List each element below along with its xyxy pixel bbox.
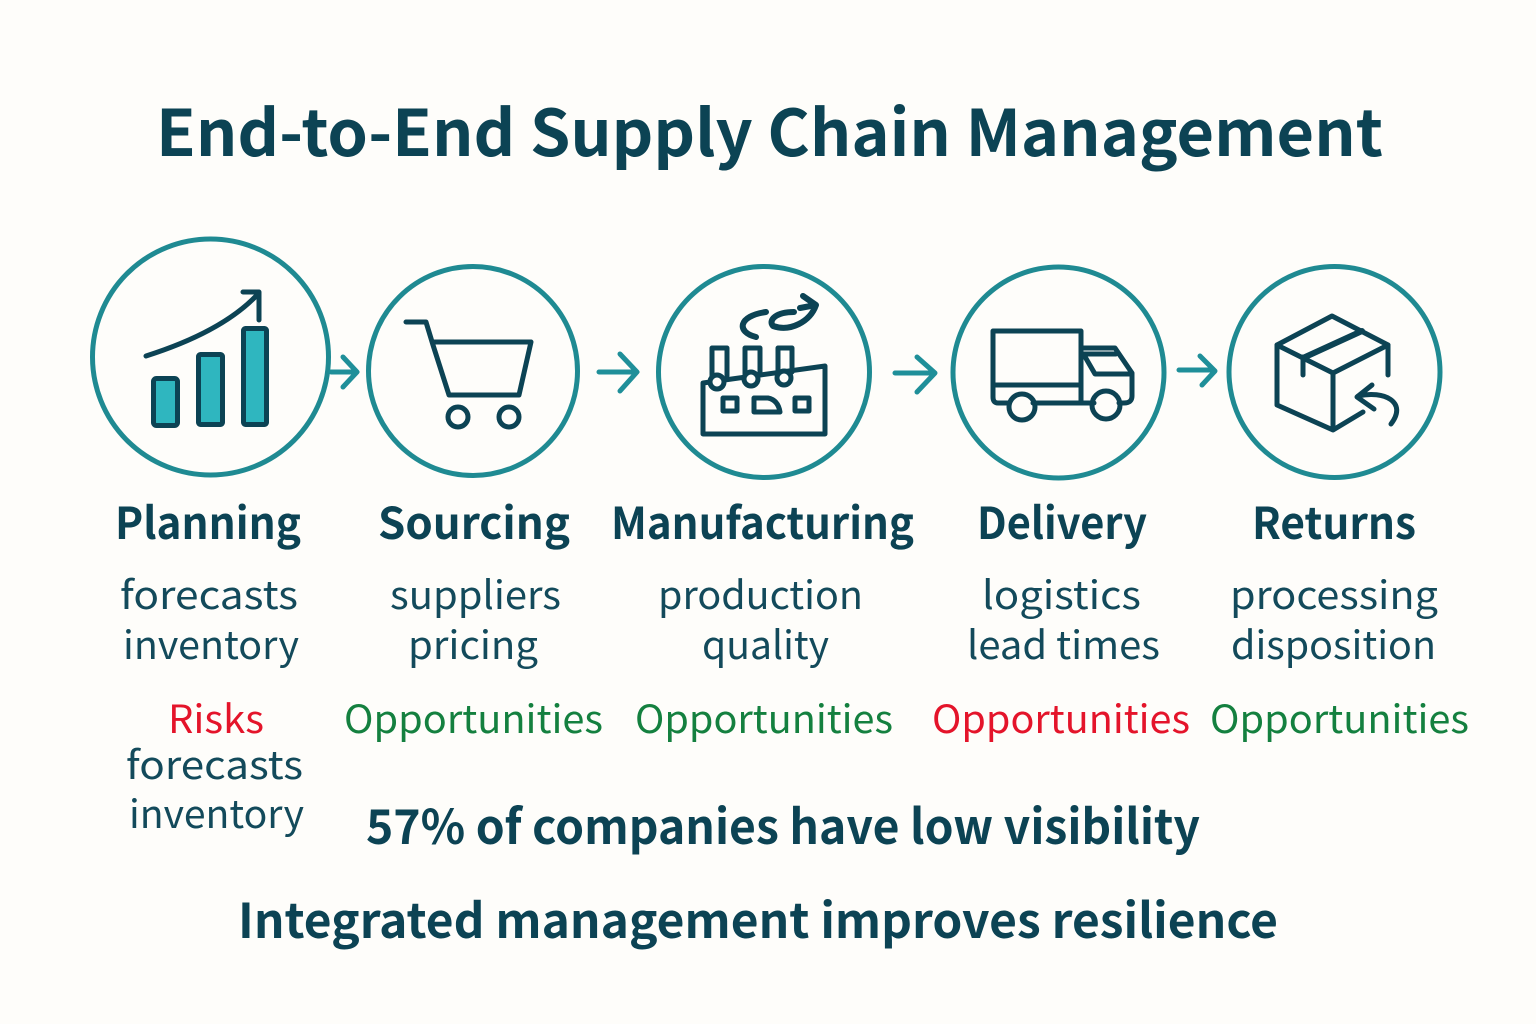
heading: returns: Returns [1252, 488, 1416, 552]
opportunities: manufacturing: Opportunities [635, 689, 893, 745]
step: planning [92, 239, 328, 840]
sourcing circle [368, 266, 578, 476]
details: delivery: logistics [982, 565, 1141, 621]
conclusion: Integrated management improves resilience [238, 882, 1278, 952]
details: manufacturing: quality [702, 615, 829, 671]
details: sourcing: suppliers [390, 565, 561, 621]
returns circle [1229, 266, 1440, 478]
step: sourcing [344, 266, 603, 745]
risks: planning: forecasts [126, 735, 303, 791]
arrow: planning to sourcing [331, 357, 357, 387]
details: returns [1230, 565, 1438, 671]
details: sourcing: pricing [408, 615, 538, 671]
heading: sourcing: Sourcing [378, 488, 570, 552]
arrow: delivery to returns [1179, 356, 1215, 385]
details: delivery [967, 565, 1160, 671]
details: delivery: lead times [967, 615, 1160, 671]
opportunities: sourcing: Opportunities [344, 689, 603, 745]
risks: planning: inventory [129, 784, 304, 840]
icon: factory [703, 296, 825, 434]
step: returns [1210, 266, 1469, 745]
icon: bar chart with rising arrow [146, 292, 266, 426]
opportunities: delivery: Opportunities [932, 689, 1190, 745]
delivery circle [953, 267, 1164, 478]
statistic: 57% of companies have low visibility [366, 788, 1200, 858]
title: End-to-End Supply Chain Management [156, 83, 1383, 175]
details: returns: disposition [1231, 615, 1436, 671]
manufacturing circle [658, 266, 870, 478]
risks: planning: Risks [168, 689, 264, 745]
heading: planning: Planning [115, 488, 301, 552]
icon: shopping cart [406, 322, 531, 427]
details: manufacturing [658, 565, 863, 671]
opportunities: returns: Opportunities [1210, 689, 1469, 745]
step: manufacturing [611, 266, 914, 745]
arrow: sourcing to manufacturing [599, 354, 637, 391]
details: planning: inventory [123, 615, 299, 671]
icon: delivery truck [993, 331, 1132, 420]
step: delivery [932, 267, 1190, 745]
details: planning: forecasts [120, 565, 298, 621]
planning circle [92, 239, 328, 475]
risks: planning [126, 689, 304, 840]
details: planning [120, 565, 299, 671]
icon: parcel with return arrow [1277, 316, 1397, 430]
details: manufacturing: production [658, 565, 863, 621]
arrow: manufacturing to delivery [895, 357, 935, 392]
details: returns: processing [1230, 565, 1438, 621]
details: sourcing [390, 565, 561, 671]
heading: delivery: Delivery [977, 488, 1147, 552]
heading: manufacturing: Manufacturing [611, 488, 914, 552]
